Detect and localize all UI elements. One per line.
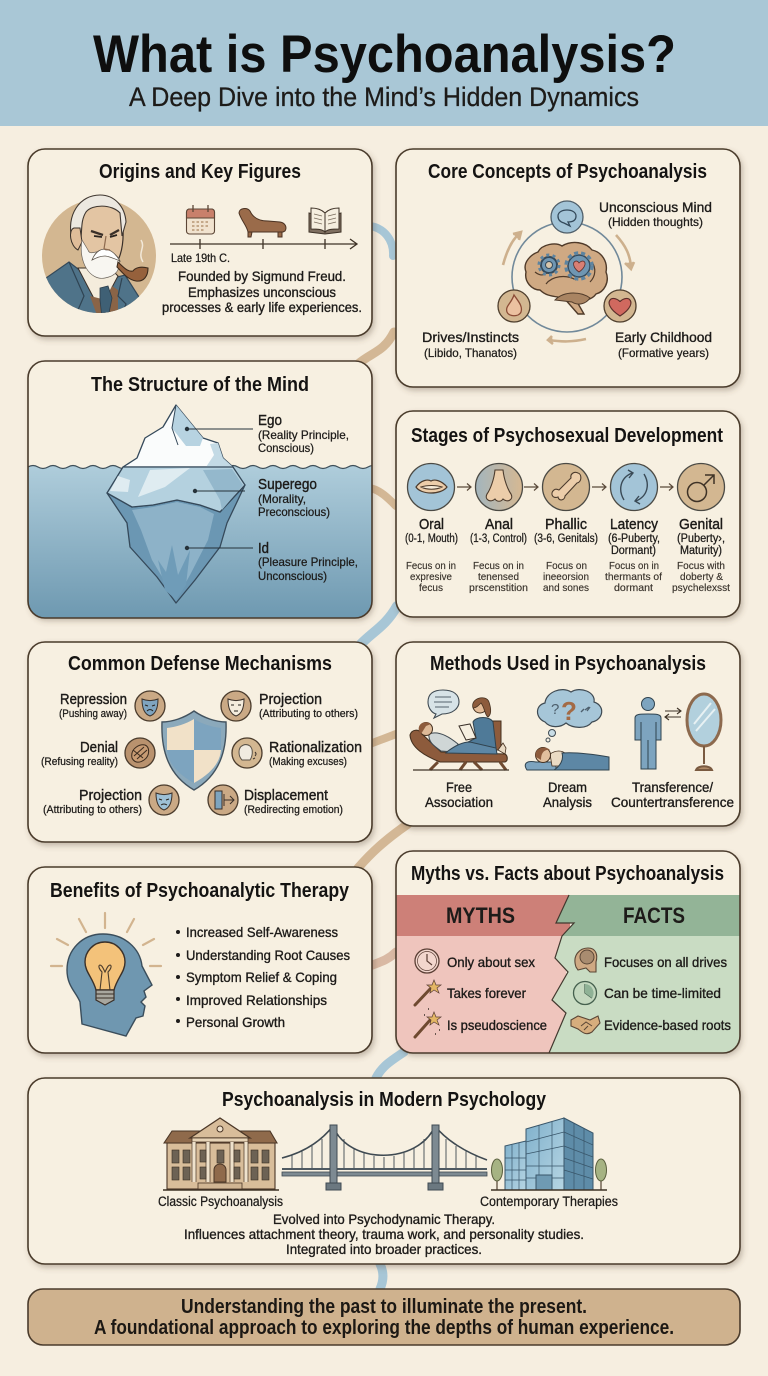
footer line two: A foundational approach to exploring the depths of human experience. xyxy=(94,1317,674,1339)
icon: classic building xyxy=(163,1118,279,1190)
illustration: free association xyxy=(410,690,509,770)
hair xyxy=(71,195,126,240)
stage: anal: prscenstition xyxy=(469,582,528,594)
icon: glass building xyxy=(491,1118,607,1190)
text: modern description: Influences attachment theory, trauma work, and personality studies. xyxy=(184,1226,584,1242)
stage: genital: psychelexsst xyxy=(672,582,730,594)
label: drives/instincts xyxy=(422,329,519,360)
illustration: transference with mirror xyxy=(635,694,721,770)
stage: oral: (0-1, Mouth) xyxy=(405,533,458,545)
heading: defense: Common Defense Mechanisms xyxy=(68,653,332,675)
list: benefits: Increased Self-Awareness xyxy=(186,924,338,940)
label: id: Unconscious) xyxy=(258,569,327,583)
label: ego xyxy=(185,412,349,455)
fact row: time-limited xyxy=(574,982,721,1004)
mechanism: projection (left) xyxy=(43,785,179,816)
label: superego: Superego xyxy=(258,476,317,493)
label: drives/instincts: (Libido, Thanatos) xyxy=(424,346,517,360)
fact row: all drives: Focuses on all drives xyxy=(604,954,727,970)
label: free association: Free xyxy=(446,779,472,795)
label: dream analysis xyxy=(543,779,592,810)
fact row: evidence-based xyxy=(571,1016,731,1034)
stage: latency: dormant xyxy=(614,582,653,594)
illustration: dream analysis: ? xyxy=(551,701,559,718)
label: ego: Conscious) xyxy=(258,441,314,455)
mechanism: repression xyxy=(59,691,165,721)
fact row: all drives xyxy=(575,948,727,972)
myths and facts columns xyxy=(396,895,740,1054)
mechanism: projection (left): (Attributing to others) xyxy=(43,804,142,816)
beard xyxy=(81,240,119,278)
iceberg xyxy=(107,405,245,603)
heading: myths vs facts: Myths vs. Facts about Psychoanalysis xyxy=(411,863,724,885)
stage: anal: Anal xyxy=(485,516,513,533)
icon: head with light bulb xyxy=(51,913,161,1036)
list: benefits: Improved Relationships xyxy=(186,992,327,1008)
illustration: dream analysis xyxy=(525,690,609,770)
couch xyxy=(410,730,507,762)
mechanism: displacement xyxy=(208,785,343,816)
myth row: only about sex: Only about sex xyxy=(447,954,535,970)
mechanism: repression: Repression xyxy=(60,691,127,708)
mechanism: projection (left): Projection xyxy=(79,787,142,804)
stage: latency: (6-Puberty, xyxy=(608,533,660,545)
stage: genital: doberty & xyxy=(680,571,723,583)
node: unconscious mind xyxy=(551,201,583,233)
fact row: evidence-based: Evidence-based roots xyxy=(604,1017,731,1033)
mechanism: denial: (Refusing reality) xyxy=(41,756,118,768)
stage: phallic: ineeorsion xyxy=(543,571,589,583)
label: transference: Countertransference xyxy=(611,794,734,810)
text: modern description: Integrated into broader practices. xyxy=(286,1241,482,1257)
stage: oral: Oral xyxy=(419,516,444,533)
title: What is Psychoanalysis? xyxy=(93,25,676,84)
label: transference: Transference/ xyxy=(632,779,713,795)
heading: origins: Origins and Key Figures xyxy=(99,161,301,183)
stage: oral: fecus xyxy=(419,582,443,594)
panel: methods xyxy=(396,642,740,826)
myth row: takes forever: Takes forever xyxy=(447,985,526,1001)
face xyxy=(80,203,123,270)
therapist chair xyxy=(493,721,501,750)
label: facts: FACTS xyxy=(623,903,685,928)
timeline xyxy=(170,205,357,249)
list: benefits: Understanding Root Causes xyxy=(186,947,350,963)
illustration: dream analysis: ? xyxy=(561,696,577,726)
label: transference xyxy=(611,779,734,810)
panel: core concepts xyxy=(396,149,740,387)
label: dream analysis: Analysis xyxy=(543,794,592,810)
stage: phallic: (3-6, Genitals) xyxy=(534,533,598,545)
label: classic psychoanalysis: Classic Psychoanalysis xyxy=(158,1194,283,1209)
fact row: time-limited: Can be time-limited xyxy=(604,985,721,1001)
heading: stages: Stages of Psychosexual Development xyxy=(411,425,723,447)
mechanism: rationalization xyxy=(232,738,362,768)
icon: couch xyxy=(239,209,286,237)
stage: latency xyxy=(605,464,662,594)
portrait: Sigmund Freud xyxy=(38,195,156,320)
label: early childhood xyxy=(615,329,712,360)
label: unconscious mind xyxy=(599,199,712,229)
label: late 19th century: Late 19th C. xyxy=(171,251,230,265)
label: unconscious mind: Unconscious Mind xyxy=(599,199,712,215)
icon: bridge xyxy=(282,1125,487,1190)
node: early childhood xyxy=(604,290,636,322)
label: superego xyxy=(193,476,330,519)
icon: calendar xyxy=(186,205,214,234)
label: unconscious mind: (Hidden thoughts) xyxy=(608,215,703,229)
panel: structure of the mind xyxy=(28,361,378,620)
panel outline xyxy=(396,851,740,1053)
text: modern description: Evolved into Psychodynamic Therapy. xyxy=(273,1211,495,1227)
stage: genital xyxy=(672,464,730,594)
panel outline xyxy=(28,361,372,618)
stage: anal xyxy=(469,464,528,594)
footer line one: Understanding the past to illuminate the present. xyxy=(181,1296,587,1318)
label: id xyxy=(185,540,358,583)
subtitle: A Deep Dive into the Mind’s Hidden Dynamics xyxy=(129,82,639,112)
label: id: (Pleasure Principle, xyxy=(258,555,358,569)
stage: phallic: Focus on xyxy=(546,560,587,572)
stage: anal: Fecus on in xyxy=(473,560,524,572)
stage: oral: expresive xyxy=(410,571,452,583)
stage: anal: tenensed xyxy=(478,571,519,583)
water xyxy=(28,466,378,620)
therapist xyxy=(468,718,496,750)
label: early childhood: (Formative years) xyxy=(618,346,709,360)
node: drives xyxy=(498,290,530,322)
stage: phallic xyxy=(534,464,598,594)
panel: modern psychology xyxy=(28,1078,740,1264)
stage: latency: thermants of xyxy=(605,571,662,583)
stage: latency: Dormant) xyxy=(611,545,656,557)
mechanism: projection (right) xyxy=(221,691,358,721)
panel: origins and key figures xyxy=(28,149,372,336)
label: ego: Ego xyxy=(258,412,282,429)
mechanism: displacement: (Redirecting emotion) xyxy=(244,804,343,816)
icon: brain with gears xyxy=(525,243,607,314)
header banner xyxy=(0,0,768,126)
heading: structure: The Structure of the Mind xyxy=(91,374,309,396)
text: origins description: Founded by Sigmund Freud. xyxy=(178,268,346,284)
panel: benefits xyxy=(28,867,372,1053)
arrows xyxy=(503,232,634,344)
stage: genital: (Puberty›, xyxy=(677,533,725,545)
icon: shield xyxy=(162,711,226,790)
stage: genital: Genital xyxy=(679,516,723,533)
text: origins description: processes & early life experiences. xyxy=(162,299,362,315)
mechanism: projection (right): (Attributing to others) xyxy=(259,708,358,720)
icon: book xyxy=(309,208,341,234)
stage: oral: Fecus on in xyxy=(406,560,456,572)
stage arrows xyxy=(457,484,673,490)
heading: benefits: Benefits of Psychoanalytic Therapy xyxy=(50,880,350,902)
label: ego: (Reality Principle, xyxy=(258,428,349,442)
stage: latency: Latency xyxy=(610,516,658,533)
text: origins description xyxy=(162,268,362,315)
stage: latency: Focus on in xyxy=(609,560,659,572)
label: myths: MYTHS xyxy=(446,903,515,928)
stage: genital: Maturity) xyxy=(680,545,722,557)
myth row: pseudoscience xyxy=(415,1009,547,1037)
speech bubble xyxy=(428,690,459,718)
pipe xyxy=(117,262,148,281)
heading: modern: Psychoanalysis in Modern Psychology xyxy=(222,1089,547,1111)
label: id: Id xyxy=(258,540,269,557)
mechanism: repression: (Pushing away) xyxy=(59,708,127,720)
concept cycle diagram xyxy=(498,201,636,344)
connector ribbons xyxy=(358,226,408,1289)
stage: anal: (1-3, Control) xyxy=(470,533,527,545)
stage: phallic: and sones xyxy=(543,582,589,594)
label: superego: Preconscious) xyxy=(258,505,330,519)
label: dream analysis: Dream xyxy=(548,779,587,795)
myth row: takes forever xyxy=(415,980,526,1005)
text: origins description: Emphasizes unconscious xyxy=(188,284,336,300)
label: free association xyxy=(425,779,493,810)
ear xyxy=(71,228,82,250)
heading: methods: Methods Used in Psychoanalysis xyxy=(430,653,706,675)
panel: common defense mechanisms xyxy=(28,642,372,842)
mechanism: denial xyxy=(41,738,155,768)
myth row: only about sex xyxy=(415,949,535,973)
panel: stages of psychosexual development xyxy=(396,411,740,617)
mechanism: denial: Denial xyxy=(80,739,118,756)
footer banner xyxy=(28,1289,740,1345)
myth row: pseudoscience: Is pseudoscience xyxy=(447,1017,547,1033)
patient xyxy=(429,733,458,752)
label: free association: Association xyxy=(425,794,493,810)
stage: phallic: Phallic xyxy=(545,516,587,533)
mechanism: displacement: Displacement xyxy=(244,787,329,804)
mechanism: rationalization: Rationalization xyxy=(269,739,362,756)
label: early childhood: Early Childhood xyxy=(615,329,712,345)
stage: oral xyxy=(405,464,458,594)
mechanism: rationalization: (Making excuses) xyxy=(269,756,347,768)
mechanism: projection (right): Projection xyxy=(259,691,322,708)
list: benefits xyxy=(176,924,350,1030)
heading: core concepts: Core Concepts of Psychoanalysis xyxy=(428,161,707,183)
label: drives/instincts: Drives/Instincts xyxy=(422,329,519,345)
label: superego: (Morality, xyxy=(258,492,306,506)
panel: myths vs facts xyxy=(396,851,740,1054)
text: modern description xyxy=(184,1211,584,1257)
list: benefits: Symptom Relief & Coping xyxy=(186,969,337,985)
list: benefits: Personal Growth xyxy=(186,1014,285,1030)
stage: genital: Focus with xyxy=(677,560,725,572)
label: contemporary therapies: Contemporary Therapies xyxy=(480,1194,618,1209)
